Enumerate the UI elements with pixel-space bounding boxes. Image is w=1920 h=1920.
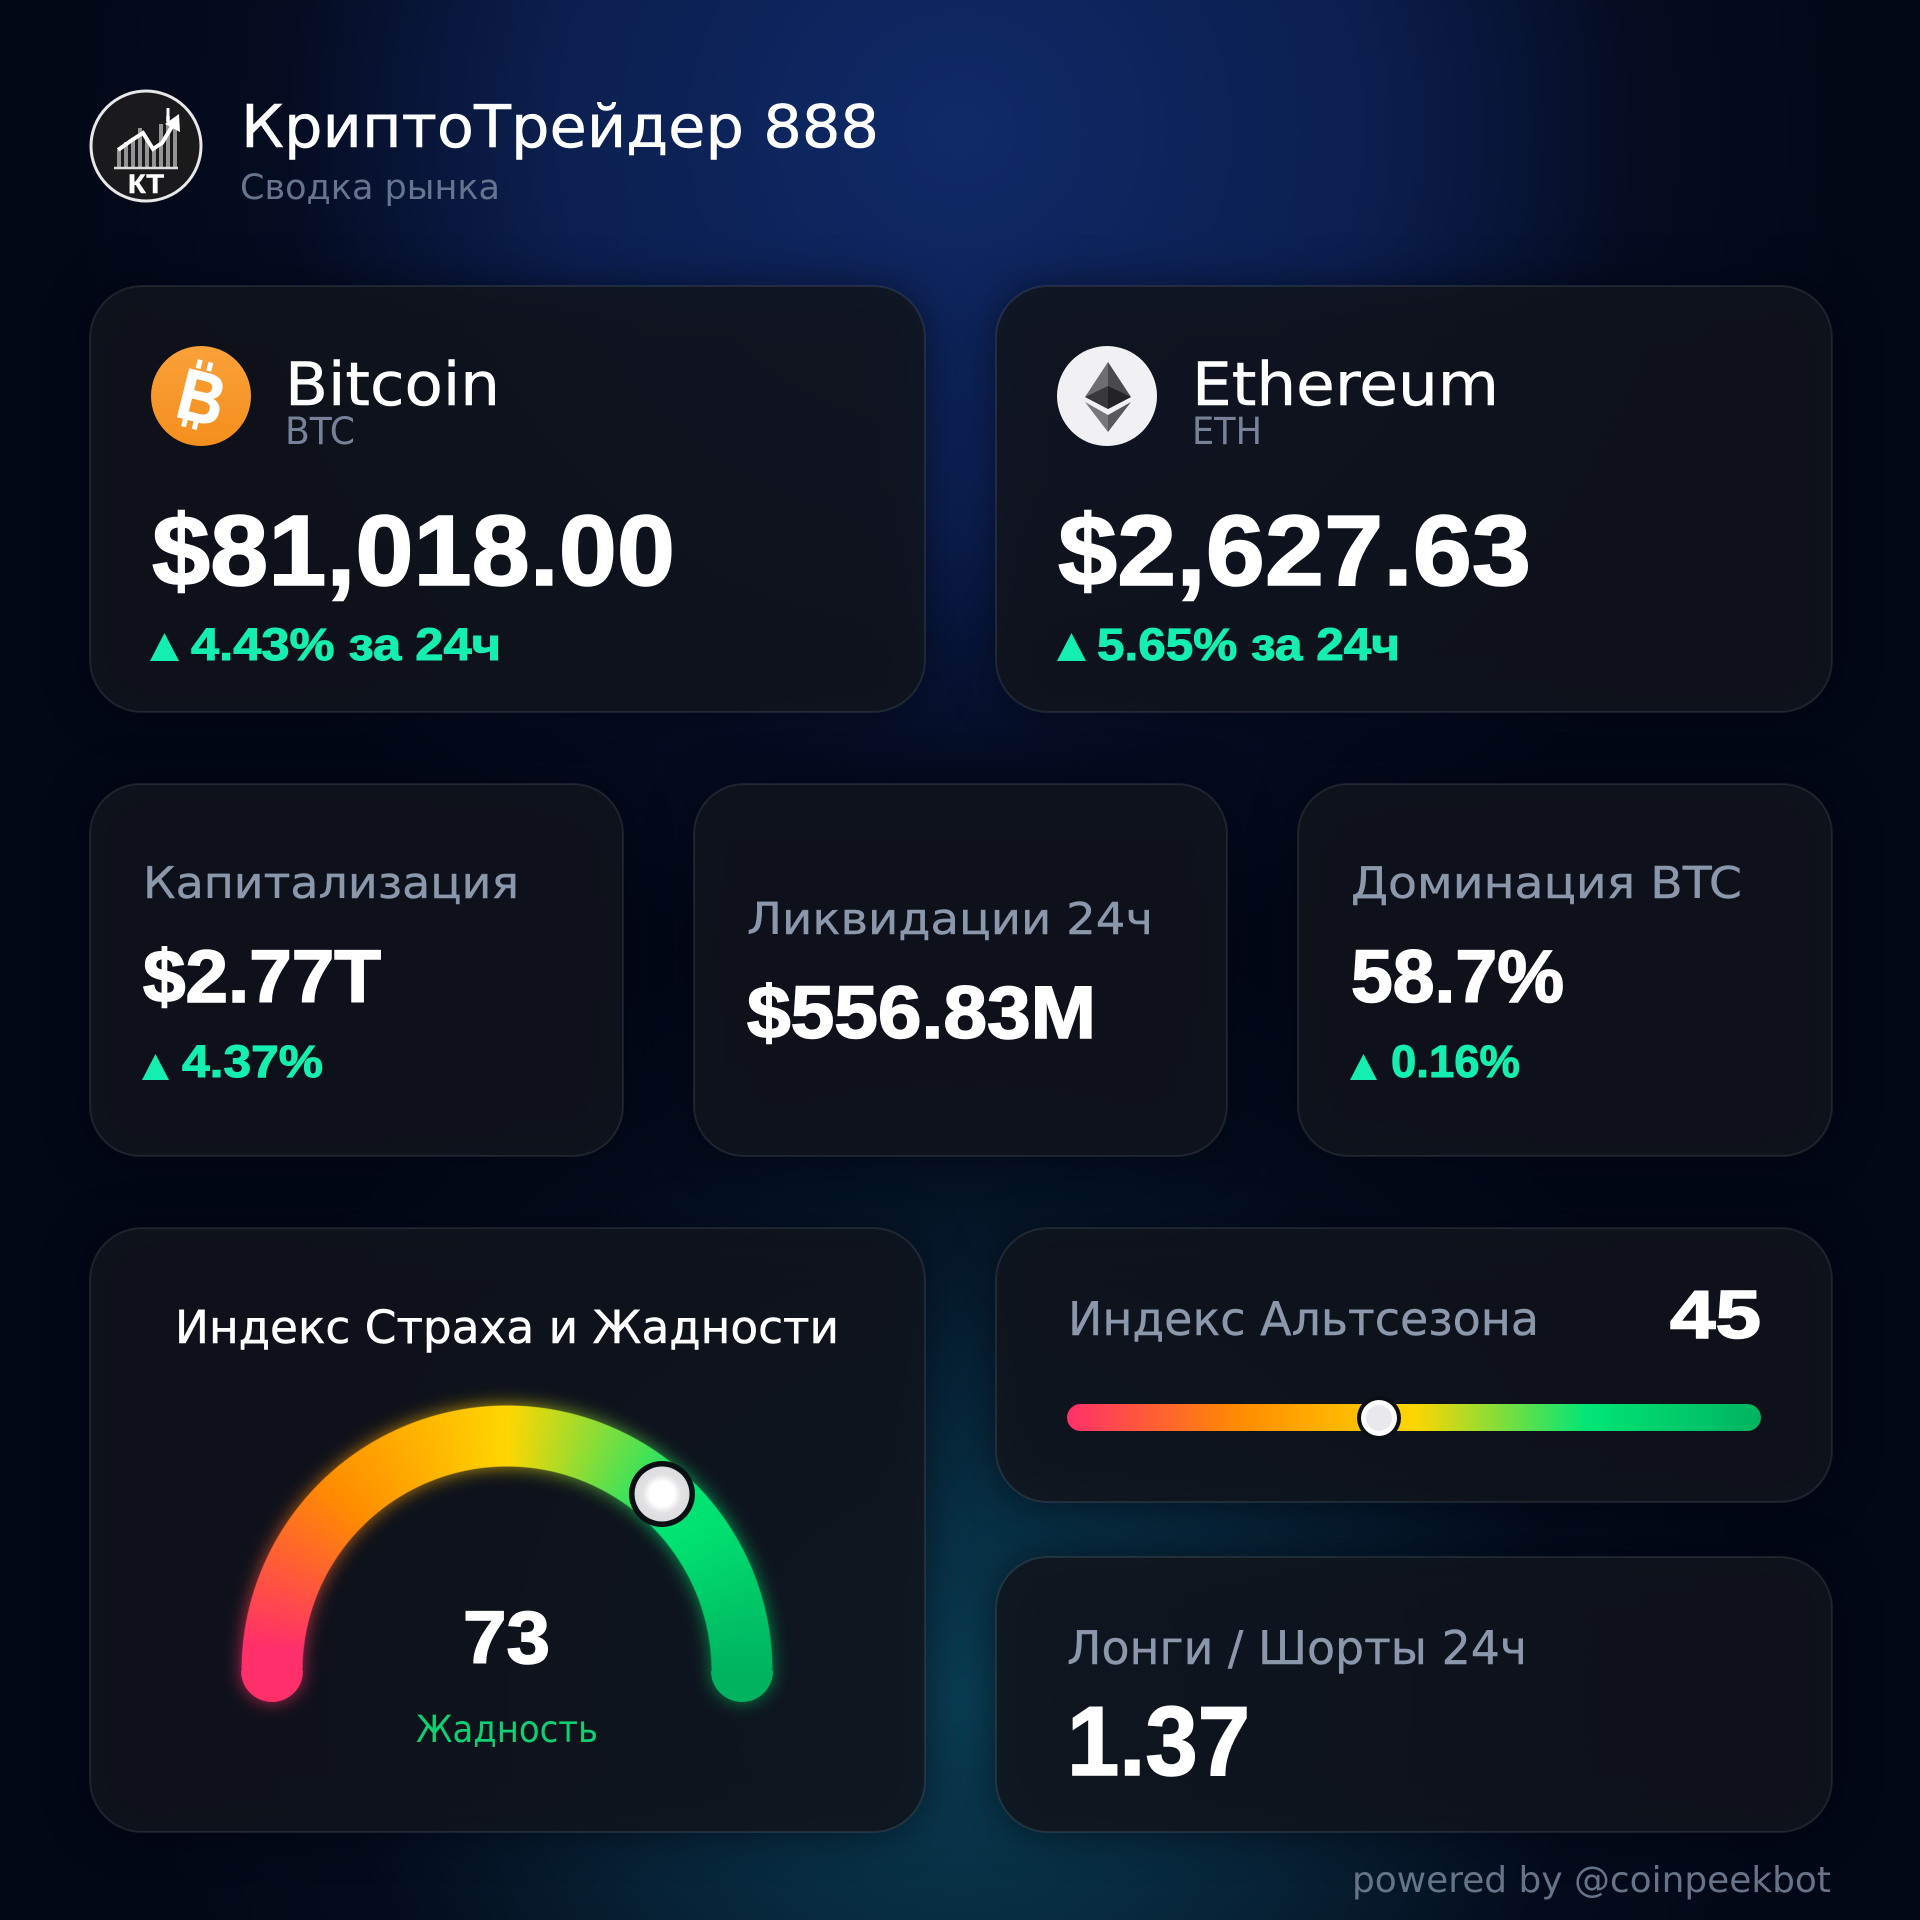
- value: 45: [1670, 1277, 1761, 1353]
- coin name: Ethereum: [1192, 350, 1499, 420]
- label: Капитализация: [143, 858, 519, 909]
- icon: logo КТ: [91, 91, 201, 201]
- value: $556.83M: [747, 971, 1096, 1054]
- panel: BTC dominance: [1298, 784, 1832, 1156]
- value: $2.77T: [143, 935, 381, 1018]
- price: $81,018.00: [152, 495, 675, 607]
- panel: fear and greed index: [90, 1228, 925, 1832]
- panel: Bitcoin: [90, 286, 925, 712]
- panel: liquidations: [694, 784, 1227, 1156]
- change: 5.65% за 24ч: [1097, 619, 1400, 670]
- title: КриптоТрейдер 888: [241, 92, 879, 161]
- change: 4.37%: [182, 1036, 323, 1087]
- change: 0.16%: [1391, 1036, 1520, 1087]
- ticker: BTC: [285, 410, 355, 453]
- label: Индекс Альтсезона: [1068, 1292, 1539, 1346]
- gauge chart: [228, 1392, 784, 1715]
- value: 1.37: [1067, 1686, 1250, 1796]
- label: Ликвидации 24ч: [747, 894, 1153, 945]
- icon: ethereum: [1057, 346, 1157, 446]
- price: $2,627.63: [1058, 495, 1531, 607]
- icon: logo КТ: КТ: [128, 169, 165, 199]
- progress bar: [1067, 1396, 1761, 1440]
- ticker: ETH: [1192, 410, 1262, 453]
- footer: powered by @coinpeekbot: [1352, 1860, 1831, 1901]
- coin name: Bitcoin: [285, 350, 500, 420]
- label: Доминация BTC: [1351, 858, 1742, 909]
- panel: altseason index: [996, 1228, 1832, 1502]
- gauge value: 73: [463, 1596, 550, 1679]
- panel: longs and shorts: [996, 1557, 1832, 1832]
- change: 4.43% за 24ч: [191, 619, 501, 670]
- label: Лонги / Шорты 24ч: [1067, 1621, 1527, 1675]
- gauge label: Жадность: [416, 1708, 598, 1751]
- heading: Индекс Страха и Жадности: [175, 1301, 839, 1354]
- header: [91, 91, 879, 208]
- gauge marker: [629, 1461, 695, 1527]
- icon: bitcoin: [151, 346, 251, 446]
- panel: Ethereum: [996, 286, 1832, 712]
- icon: bitcoin: B: [169, 354, 233, 443]
- panel: market cap: [90, 784, 623, 1156]
- subtitle: Сводка рынка: [240, 168, 500, 208]
- value: 58.7%: [1351, 935, 1564, 1018]
